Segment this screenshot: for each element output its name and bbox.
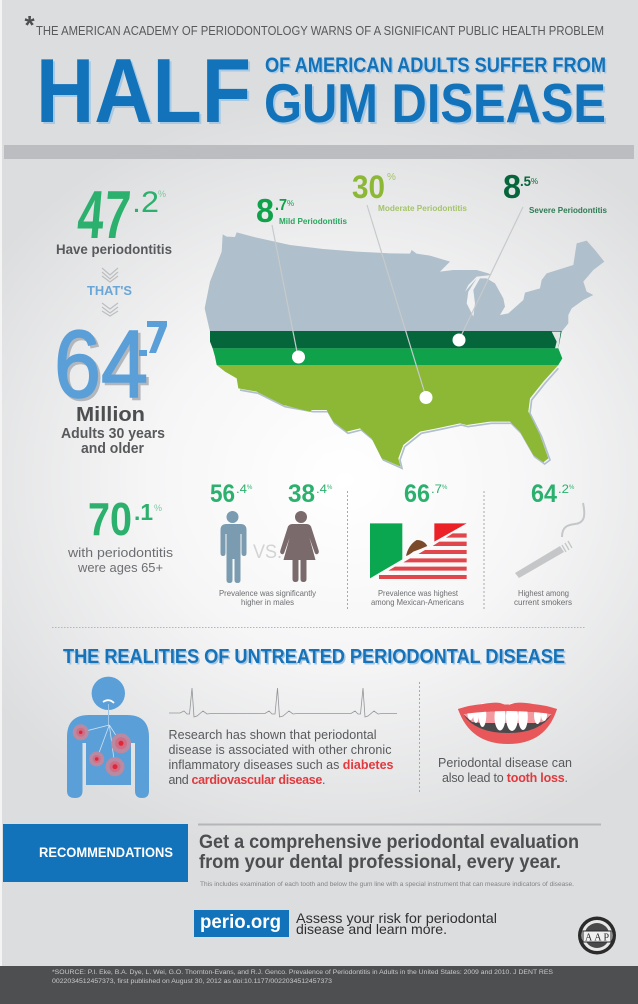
header tagline: * bbox=[24, 10, 36, 40]
stat: 64.2 percent: % bbox=[569, 485, 575, 491]
label: severe periodontitis 8.5 percent bbox=[503, 168, 608, 215]
label: mild periodontitis 8.7 percent: Mild Periodontitis bbox=[279, 217, 348, 226]
stat: 64.2 percent: .2 bbox=[558, 482, 569, 496]
label: mild periodontitis 8.7 percent bbox=[256, 192, 348, 229]
heading: realities of untreated periodontal disease: THE REALITIES OF UNTREATED PERIODONTAL DISEASE bbox=[64, 648, 566, 670]
stat: 38.4 percent females bbox=[288, 480, 333, 508]
text block: research bbox=[168, 728, 394, 787]
text: assess your risk: Assess your risk for periodontal bbox=[296, 910, 497, 926]
label: severe periodontitis 8.5 percent: .5 bbox=[520, 173, 531, 189]
panel: recommendations banner bbox=[3, 824, 188, 882]
label: vs: VS. bbox=[253, 542, 282, 563]
caption: higher in males: higher in males bbox=[241, 597, 294, 607]
callout lines and dots bbox=[272, 205, 523, 404]
title: half of American adults suffer from gum disease: HALF bbox=[36, 41, 251, 142]
heading: realities of untreated periodontal disease: THE REALITIES OF UNTREATED PERIODONTAL DISEASE bbox=[63, 646, 565, 668]
stat: 66.7 percent: .7 bbox=[431, 482, 442, 496]
stat: 66.7 percent: % bbox=[442, 485, 448, 491]
label: moderate periodontitis 30 percent bbox=[352, 169, 468, 213]
label: with periodontitis were ages 65+ bbox=[67, 545, 174, 575]
label: with periodontitis were ages 65+: were ages 65+ bbox=[77, 560, 163, 575]
text block: research: inflammatory diseases such as diabetes bbox=[168, 758, 394, 772]
text block: research: and cardiovascular disease. bbox=[168, 773, 326, 787]
text block: tooth loss bbox=[438, 756, 572, 785]
icon: man bbox=[220, 511, 246, 583]
caption: higher in males: Prevalence was significantly bbox=[219, 588, 317, 598]
text block: research: disease is associated with other chronic bbox=[168, 743, 392, 757]
stat: 70.1 percent: % bbox=[154, 503, 162, 513]
icon: chevrons down bbox=[102, 268, 118, 316]
logo: AAP seal: AAP bbox=[585, 932, 609, 944]
stat: 38.4 percent females: % bbox=[327, 485, 333, 491]
stat: 70.1 percent: 70 bbox=[88, 493, 132, 545]
panel: Mexican-Americans bbox=[370, 480, 467, 607]
label: severe periodontitis 8.5 percent: 8 bbox=[503, 168, 521, 205]
stat: 66.7 percent: 66 bbox=[404, 480, 430, 508]
label: moderate periodontitis 30 percent: 30 bbox=[352, 169, 385, 205]
stat: 47.2 percent: % bbox=[158, 189, 166, 199]
label: moderate periodontitis 30 percent: % bbox=[387, 172, 396, 183]
chart: ECG heartbeat line bbox=[169, 688, 397, 717]
map of USA bbox=[205, 232, 604, 468]
text block: tooth loss: Periodontal disease can bbox=[438, 756, 572, 770]
label: million adults 30 years and older: and older bbox=[81, 441, 144, 457]
stat: 56.4 percent males: % bbox=[247, 485, 253, 491]
logo: AAP seal bbox=[578, 916, 616, 954]
stat: 38.4 percent females: .4 bbox=[316, 482, 327, 496]
caption: highest among Mexican-Americans bbox=[371, 588, 464, 607]
icon: woman bbox=[280, 511, 319, 582]
caption: highest among Mexican-Americans: among Mexican-Americans bbox=[371, 597, 464, 607]
stat: 56.4 percent males: .4 bbox=[236, 482, 247, 496]
panel: gender comparison bbox=[210, 480, 333, 607]
stat: 70.1 percent bbox=[88, 493, 162, 545]
title: half of American adults suffer from gum disease bbox=[36, 41, 608, 144]
grey divider bar bbox=[4, 145, 634, 159]
caption: highest among current smokers bbox=[514, 588, 572, 607]
text: assess your risk: disease and learn more. bbox=[296, 921, 447, 937]
text block: tooth loss: also lead to tooth loss. bbox=[442, 771, 568, 785]
heading: recommendation text: from your dental professional, every year. bbox=[199, 852, 561, 873]
label: million adults 30 years and older: Adults 30 years bbox=[61, 426, 165, 442]
label: mild periodontitis 8.7 percent: .7 bbox=[275, 197, 287, 214]
label: million adults 30 years and older bbox=[61, 404, 165, 457]
stat: 47.2 percent: 47 bbox=[75, 177, 133, 253]
stat: 38.4 percent females: 38 bbox=[288, 480, 315, 508]
panel: smokers bbox=[514, 480, 584, 607]
stat: 64.2 percent: 64 bbox=[531, 480, 557, 508]
caption: highest among current smokers: Highest among bbox=[518, 588, 569, 598]
panel: recommendations banner: RECOMMENDATIONS bbox=[39, 845, 173, 860]
icon: cigarette with smoke bbox=[515, 503, 584, 578]
caption: highest among Mexican-Americans: Prevalence was highest bbox=[378, 588, 459, 598]
stat: 56.4 percent males bbox=[210, 480, 253, 508]
label: severe periodontitis 8.5 percent: Severe Periodontitis bbox=[529, 206, 608, 215]
text: assess your risk bbox=[296, 910, 497, 937]
heading: recommendation text bbox=[199, 832, 579, 873]
stat: 64.7 million: 64 bbox=[56, 314, 150, 420]
panel: US map by severity bbox=[205, 168, 608, 468]
label: mild periodontitis 8.7 percent: % bbox=[287, 199, 294, 208]
label: that's: THAT'S bbox=[87, 283, 132, 298]
stat: 64.7 million: 64 bbox=[54, 311, 148, 418]
header tagline bbox=[24, 10, 604, 40]
stat: 56.4 percent males: 56 bbox=[210, 480, 235, 508]
stat: 70.1 percent: .1 bbox=[134, 499, 153, 525]
text block: research: Research has shown that periodontal bbox=[168, 728, 376, 742]
badge: perio.org bbox=[194, 910, 289, 937]
footer: source citation: *SOURCE: P.I. Eke, B.A. Dye, L. Wei, G.O. Thornton-Evans, and R.J. Genco. Prevalence of Periodontitis in Adults in the United States: 2009 and 2010. J DENT RES bbox=[52, 969, 553, 976]
footer: source citation: 0022034512457373, first published on August 30, 2012 as doi:10.1177/0022034512457373 bbox=[52, 978, 332, 985]
icon: split Mexican and American flag bbox=[370, 523, 467, 579]
panel: prevalence stats column bbox=[54, 177, 174, 575]
text: examination note: This includes examination of each tooth and below the gum line with a special instrument that can measure indicators of disease. bbox=[200, 881, 574, 888]
label: moderate periodontitis 30 percent: Moderate Periodontitis bbox=[378, 204, 468, 213]
label: million adults 30 years and older: Million bbox=[76, 404, 145, 426]
stat: 66.7 percent bbox=[404, 480, 448, 508]
stat: 64.2 percent bbox=[531, 480, 575, 508]
heading: recommendation text: Get a comprehensive periodontal evaluation bbox=[199, 832, 579, 853]
label: mild periodontitis 8.7 percent: 8 bbox=[256, 192, 274, 229]
label: with periodontitis were ages 65+: with periodontitis bbox=[67, 545, 174, 560]
label: have periodontitis: Have periodontitis bbox=[56, 242, 172, 257]
label: severe periodontitis 8.5 percent: % bbox=[531, 177, 538, 186]
badge: perio.org: perio.org bbox=[200, 912, 281, 933]
title: half of American adults suffer from gum disease: HALF bbox=[38, 43, 253, 144]
stat: 47.2 percent: .2 bbox=[132, 186, 159, 219]
footer: source citation bbox=[0, 966, 638, 1004]
icon: smile with missing teeth bbox=[458, 703, 557, 744]
icon: human body with inflammation bbox=[67, 677, 149, 798]
caption: higher in males bbox=[219, 588, 317, 607]
caption: highest among current smokers: current smokers bbox=[514, 597, 572, 607]
title: half of American adults suffer from gum disease: GUM DISEASE bbox=[264, 72, 606, 134]
